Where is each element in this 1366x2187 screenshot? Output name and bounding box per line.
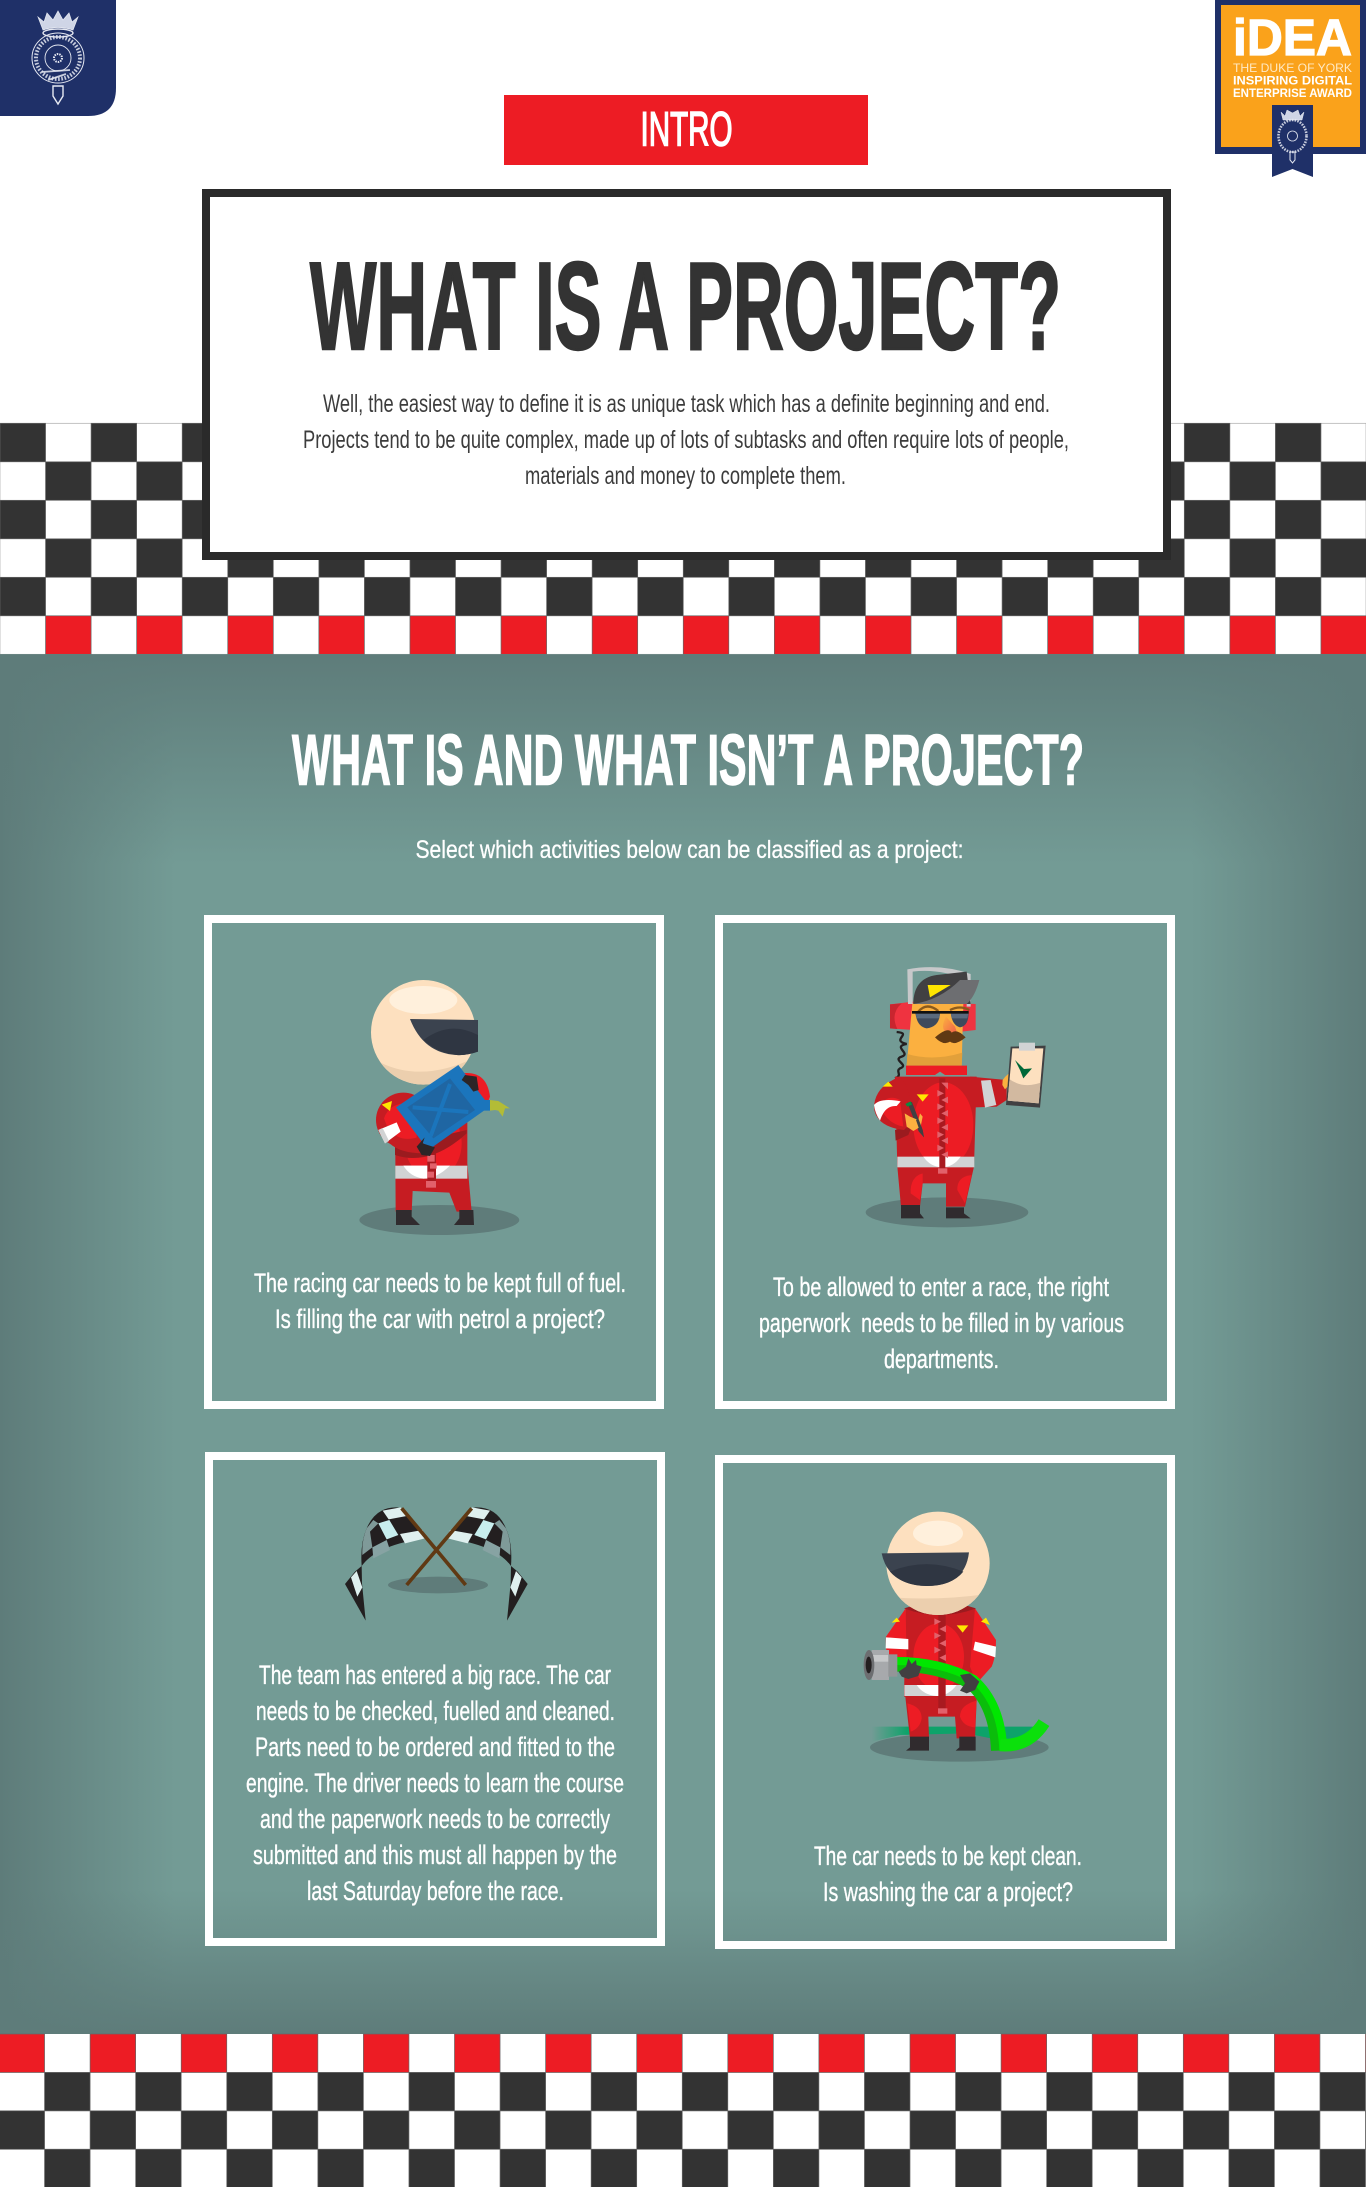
card text — [759, 1272, 1124, 1374]
intro label — [504, 95, 868, 165]
panel: IDEA award badge — [1215, 0, 1366, 177]
badge subtitle: ENTERPRISE AWARD — [1233, 86, 1352, 100]
card text: paperwork needs to be filled in by various — [759, 1308, 1124, 1338]
illustration: driver with hose — [864, 1512, 1049, 1762]
card text: engine. The driver needs to learn the course — [246, 1768, 624, 1798]
icon: royal crest — [32, 11, 84, 104]
card text: To be allowed to enter a race, the right — [773, 1272, 1109, 1302]
card text: The team has entered a big race. The car — [259, 1660, 611, 1690]
intro paragraph: materials and money to complete them. — [525, 462, 846, 490]
illustration: crossed checkered flags — [345, 1507, 528, 1621]
bottom checkered band — [0, 2034, 1366, 2187]
panel: activities section background — [0, 654, 1366, 2034]
panel: washing card — [719, 1459, 1171, 1945]
illustration: race official with clipboard — [866, 967, 1046, 1227]
card text: and the paperwork needs to be correctly — [260, 1804, 611, 1834]
card text — [814, 1841, 1082, 1907]
intro paragraph — [303, 390, 1069, 490]
card text: The racing car needs to be kept full of fuel. — [254, 1268, 626, 1298]
badge subtitle: INSPIRING DIGITAL — [1233, 74, 1352, 88]
card text: submitted and this must all happen by the — [253, 1840, 617, 1870]
badge subtitle — [1233, 61, 1352, 100]
intro paragraph: Well, the easiest way to define it is as unique task which has a definite beginning and end. — [323, 390, 1050, 418]
right flag — [448, 1507, 528, 1621]
panel: what is a project — [206, 193, 1167, 556]
card text: The car needs to be kept clean. — [814, 1841, 1082, 1871]
panel: fuel card — [208, 919, 660, 1405]
card text — [254, 1268, 626, 1334]
panel: crest corner tab — [0, 0, 116, 116]
card text: last Saturday before the race. — [307, 1876, 564, 1906]
card text: Is washing the car a project? — [823, 1877, 1073, 1907]
left flag — [345, 1507, 425, 1621]
panel: paperwork card — [719, 919, 1171, 1405]
badge ribbon with crest — [1272, 105, 1313, 177]
top checkered band — [0, 423, 1366, 654]
badge subtitle: THE DUKE OF YORK — [1233, 61, 1352, 75]
card text: needs to be checked, fuelled and cleaned. — [256, 1696, 615, 1726]
badge wordmark: iDEA — [1233, 9, 1352, 66]
intro label: INTRO — [640, 104, 732, 156]
illustration: driver with fuel can — [359, 980, 519, 1235]
intro paragraph: Projects tend to be quite complex, made up of lots of subtasks and often require lots of people, — [303, 426, 1069, 454]
panel: big race card — [209, 1456, 661, 1942]
card text: Parts need to be ordered and fitted to the — [255, 1732, 615, 1762]
card text — [246, 1660, 624, 1906]
card text: departments. — [884, 1344, 999, 1374]
section instruction: Select which activities below can be classified as a project: — [416, 836, 964, 864]
card text: Is filling the car with petrol a project? — [275, 1304, 605, 1334]
